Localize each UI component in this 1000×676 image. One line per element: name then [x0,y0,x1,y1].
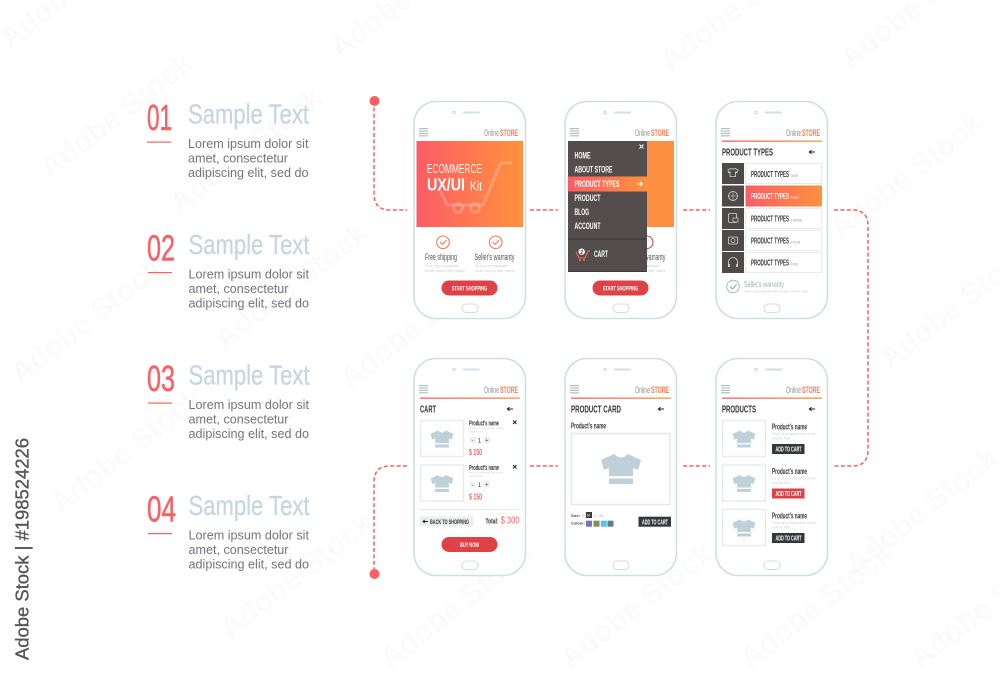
free shipping text: Sed ut perspiciatis [425,263,459,268]
type row 3 [722,208,822,229]
description 02: amet, consectetur [188,281,289,296]
cart item 2 [420,465,516,502]
menu items: ACCOUNT [574,221,601,231]
background watermark: Adobe Stock [334,256,499,396]
menu items: PRODUCT [574,193,601,203]
screen heading: PRODUCTS [722,404,756,416]
product 3: ADD TO CART [776,536,802,542]
store logo: Online [484,128,499,138]
cart item 2: omnis iste [469,474,483,478]
menu items: BLOG [574,207,589,217]
store logo: Online [786,385,801,395]
phone 6: products list: STORE [802,385,820,395]
menu items: PRODUCT TYPES [574,179,620,189]
step 04 [147,488,310,572]
cart icon with badge: 2 [580,250,583,256]
phone 1: home screen [414,102,526,318]
menu items: ABOUT STORE [574,165,612,175]
back to shopping button [420,516,474,526]
cart item 2: Product's name [469,465,499,472]
cart label: CART [594,249,608,259]
total: Total: [486,517,498,526]
warranty note: Sed ut perspiciatis unde omnis iste [744,288,809,294]
type row 5: FIVE [790,262,799,266]
heading 03: Sample Text [188,360,310,390]
size selector: Size: [571,513,580,518]
cart item 2: $ 150 [469,492,482,502]
type row 4 [722,230,822,251]
hero banner [416,141,523,227]
background watermark: Adobe Stock [4,251,169,391]
connector start dot [370,96,380,106]
description 03 [188,397,309,441]
connector end dot [370,569,380,579]
description 03: Lorem ipsum dolor sit [188,397,309,412]
screen heading: CART [420,404,436,416]
product image [572,434,670,504]
type row 2 (active) [722,186,822,206]
stock credit: Adobe Stock | #198524226 [12,438,32,660]
store logo: Online [635,128,650,138]
background watermark: Adobe Stock [164,81,329,221]
seller's warranty text: Sed ut perspiciatis [474,263,508,268]
type row 5 [722,252,822,273]
start shopping button [442,280,498,296]
heading 02: Sample Text [188,229,310,260]
obscured warranty text: Seller's warranty [626,252,666,262]
cart item 2: + [485,482,488,488]
type row 3: PRODUCT TYPES [751,214,789,224]
size selector: S [582,513,585,518]
type row 3: THREE [790,218,803,222]
description 03: amet, consectetur [188,412,289,426]
back to shopping button: BACK TO SHOPPING [430,519,469,526]
step 01 [147,97,309,180]
free shipping text [425,252,465,273]
store logo: Online [484,385,499,395]
back arrow [507,407,513,411]
size selector: XL [599,513,605,518]
product 3: Sed ut perspiciatis unde [772,520,817,525]
seller's warranty text [474,252,515,273]
store logo: Online [786,128,801,138]
description 01 [188,136,309,180]
buy now button [442,537,498,552]
back arrow [809,407,815,411]
hero title [427,161,482,194]
description 01: Lorem ipsum dolor sit [188,136,309,151]
description 04: adipiscing elit, sed do [188,556,309,572]
seller's warranty text: unde omnis iste natus [474,268,514,273]
type row 5: PRODUCT TYPES [751,258,789,268]
background watermark: Adobe Stock [34,46,199,186]
description 02: adipiscing elit, sed do [188,296,309,310]
background watermark: Adobe Stock [374,536,539,676]
cart item 1: $ 150 [469,448,482,457]
phone 2: menu screen: STORE [651,128,669,138]
screen heading: PRODUCT TYPES [722,148,773,158]
type row 4: PRODUCT TYPES [751,236,789,246]
icon: check 1 [437,236,449,249]
phone 4: cart [414,358,526,576]
cart item 1: Sed ut perspiciatis unde [469,426,503,430]
phone 4: cart: STORE [500,385,518,395]
background watermark: Adobe Stock [554,536,719,676]
product 2: omnis iste [772,480,791,485]
warranty note: Seller's warranty [744,279,784,289]
step 03 [147,358,310,441]
description 01: adipiscing elit, sed do [188,165,308,180]
product 1: ADD TO CART [776,446,802,454]
cart item 1: omnis iste [469,430,483,434]
add to cart button [638,517,671,527]
colour selector: Colour: [571,520,585,526]
cart item 1: + [485,438,488,444]
menu items: HOME [574,150,590,160]
start shopping button: START SHOPPING [452,286,487,292]
product 1: Sed ut perspiciatis unde [772,431,817,436]
product 1: omnis iste [772,436,791,440]
back arrow [809,150,815,154]
type row 1: PRODUCT TYPES [751,170,789,179]
cart item 2: 1 [478,483,482,489]
type row 4: FOUR [790,240,801,244]
heading 04: Sample Text [188,490,310,521]
product 3: Product's name [772,512,807,520]
icon: shopping cart [440,163,512,212]
number 01: 01 [147,97,172,138]
free shipping text: unde omnis iste natus [425,268,465,273]
warranty note [727,279,809,294]
phone 1: home screen: STORE [500,128,518,138]
obscured warranty text: Sed ut perspiciatis [626,263,660,268]
description 02 [188,266,309,310]
phone 2: menu screen [565,102,676,318]
hero title: ECOMMERCE [427,161,482,176]
product 3 [722,510,817,546]
menu items [574,150,620,231]
hero title: UX/UI [427,174,465,194]
screen heading: PRODUCT CARD [571,404,621,416]
description 04: Lorem ipsum dolor sit [188,528,309,542]
product name: Product's name [571,422,606,430]
phone 5: product card: STORE [651,385,669,395]
number 03: 03 [147,358,175,399]
obscured warranty text [626,252,666,273]
store logo: Online [635,385,650,395]
phone 6: products list [716,358,828,576]
phone 3: product types [716,102,828,318]
heading 01: Sample Text [188,98,309,130]
hero banner behind menu [641,141,674,227]
cart item 1 [420,420,516,457]
highlighted menu row [568,176,647,192]
seller's warranty text: Seller's warranty [474,252,515,262]
background watermark: Adobe Stock [734,536,899,676]
type row 2 (active): PRODUCT TYPES [751,192,789,201]
phone 3: product types: STORE [802,128,820,138]
total [486,516,520,527]
start shopping button: START SHOPPING [603,286,638,292]
cart item 1: - [472,438,474,444]
buy now button: BUY NOW [460,543,479,549]
product 2: ADD TO CART [776,491,802,498]
obscured warranty text: unde omnis iste natus [626,268,666,273]
product 3: omnis iste [772,524,791,530]
free shipping text: Free shipping [425,252,457,262]
description 04 [188,528,309,572]
background watermark: Adobe Stock [44,381,209,521]
hero title: Kit [470,178,482,194]
product 2 [722,465,817,501]
cart item 1: Product's name [469,420,499,428]
start shopping button [592,280,648,296]
cart item 2: Sed ut perspiciatis unde [469,470,503,474]
background watermark: Adobe Stock [214,506,379,646]
background watermark: Adobe Stock [824,106,989,246]
dashed connector path [374,101,868,574]
size selector: M [587,514,590,518]
product 2: Sed ut perspiciatis unde [772,476,817,480]
colour selector [571,520,614,527]
type row 1 [722,163,822,184]
type row 2 (active): TWO [790,196,799,200]
cart item 1: 1 [478,438,482,444]
background watermark: Adobe Stock [839,441,1000,581]
obscured check icon [640,236,653,249]
description 04: amet, consectetur [188,542,289,557]
description 02: Lorem ipsum dolor sit [188,266,309,282]
phone 5: product card [565,358,676,576]
product 2: Product's name [772,467,807,476]
cart item 2: - [472,482,474,488]
product 1: Product's name [772,422,807,432]
add to cart button: ADD TO CART [642,519,668,526]
product 1 [722,420,817,456]
type row 1: ONE [790,174,799,178]
back arrow [658,407,664,411]
total: $ 300 [501,516,520,527]
number 04: 04 [147,488,176,530]
size selector: L [594,513,598,518]
size selector [571,512,605,518]
icon: check 2 [489,236,502,249]
dropdown menu [568,141,647,272]
background watermark: Adobe Stock [209,216,374,356]
description 01: amet, consectetur [188,150,289,166]
description 03: adipiscing elit, sed do [188,426,309,441]
number 02: 02 [147,228,175,268]
step 02 [147,228,310,310]
